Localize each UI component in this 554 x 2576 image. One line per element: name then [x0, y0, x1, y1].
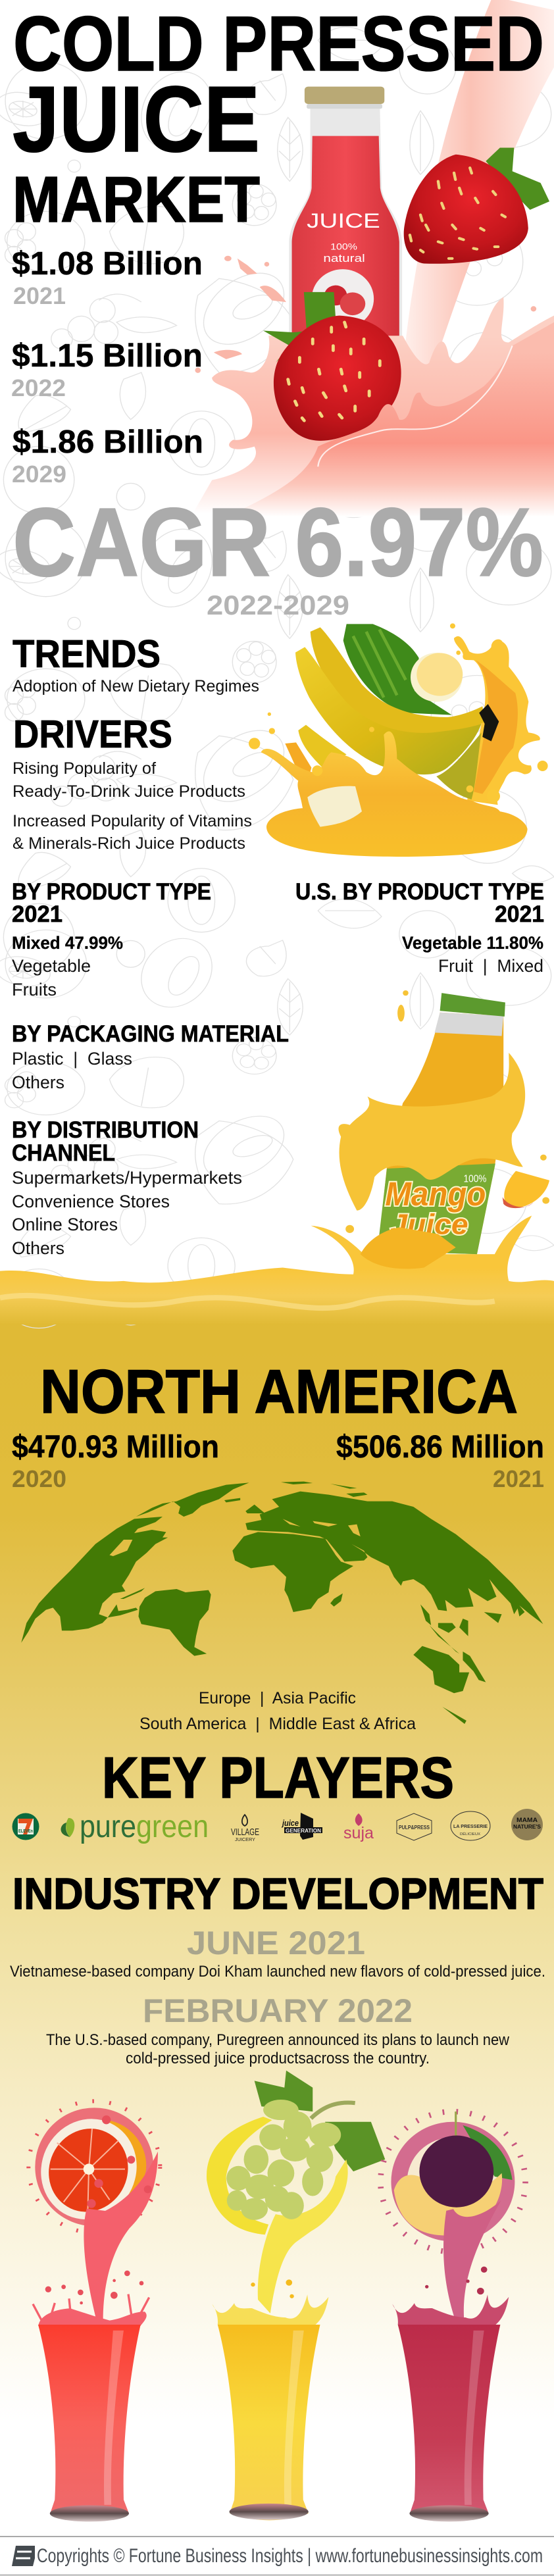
logo: 7-Eleven: ELEVEn [18, 1829, 33, 1834]
development: June 2021 [10, 1925, 545, 1981]
trends section [13, 632, 259, 695]
mango juice label text: 100% [464, 1174, 486, 1184]
by packaging material: Plastic | Glass [12, 1049, 132, 1069]
mango bottle [378, 993, 505, 1254]
small banana [298, 725, 347, 768]
North America 2020 value: 2020 [12, 1465, 66, 1492]
key player logos [12, 1809, 543, 1844]
North America heading: NORTH AMERICA [40, 1357, 518, 1426]
drivers section: & Minerals-Rich Juice Products [13, 834, 245, 853]
by distribution channel: Supermarkets/Hypermarkets [12, 1168, 242, 1188]
by distribution channel: Others [12, 1238, 64, 1258]
logo: Mama Nature's: MAMA [516, 1817, 538, 1823]
key players heading: KEY PLAYERS [102, 1745, 454, 1810]
logo: Juice Generation: juice [281, 1818, 299, 1828]
logo: 7-Eleven [12, 1813, 39, 1840]
yellow gradient background [0, 1316, 554, 2540]
value 2021: 2021 [13, 282, 66, 309]
illustration: mango juice bottle and wave [0, 990, 554, 1325]
splash foreground [226, 322, 554, 517]
value 2022: $1.15 Billion [12, 338, 203, 374]
drivers section: Increased Popularity of Vitamins [13, 812, 252, 830]
footer logo [12, 2546, 35, 2566]
by packaging material [12, 1021, 289, 1092]
logo: puregreen: pure [80, 1809, 136, 1844]
North America 2021 value: $506.86 Million [336, 1430, 544, 1465]
title: MARKET [13, 163, 260, 236]
juice bottle [289, 87, 402, 436]
mango slice [504, 1171, 549, 1207]
drivers section [13, 713, 252, 853]
banana slice top [411, 653, 463, 702]
by packaging material: Others [12, 1073, 64, 1092]
value 2022: 2022 [11, 374, 66, 401]
logo: La Presserie: LA PRESSERIE [453, 1823, 488, 1829]
red grapefruit fruit and pour [24, 2101, 160, 2326]
other regions list: South America | Middle East & Africa [139, 1715, 416, 1733]
mango juice label text [385, 1174, 486, 1240]
drivers section: Ready-To-Drink Juice Products [13, 782, 245, 801]
by packaging material: BY PACKAGING MATERIAL [12, 1021, 289, 1047]
development: June 2021: JUNE 2021 [187, 1925, 365, 1961]
logo: Village Juicery: VILLAGE [231, 1827, 259, 1838]
logo: Juice Generation: GENERATION [286, 1828, 321, 1834]
CAGR figure: 2022-2029 [207, 590, 349, 620]
trends section: Adoption of New Dietary Regimes [13, 677, 259, 695]
U.S. by product type [295, 879, 544, 976]
juice bottle: JUICE [307, 209, 380, 232]
logo: Mama Nature's [511, 1809, 543, 1840]
by distribution channel: CHANNEL [12, 1140, 115, 1166]
value 2021 [12, 246, 203, 309]
juice wave [0, 1215, 554, 1325]
mango cubes [361, 1227, 456, 1269]
juice droplets [195, 256, 536, 373]
logo: Village Juicery: JUICERY [235, 1838, 255, 1842]
by distribution channel: Online Stores [12, 1215, 118, 1234]
value 2029: 2029 [12, 461, 66, 488]
drivers section: DRIVERS [13, 713, 172, 756]
droplets [345, 990, 549, 1233]
market values [11, 246, 203, 488]
mango juice label text: Mango [385, 1176, 486, 1213]
North America 2021 value [336, 1430, 544, 1492]
right juice splash [454, 636, 540, 805]
yellow grape fruit, pour and glass [207, 2071, 385, 2520]
third banana [436, 732, 482, 799]
logo: Pulp & Press [397, 1813, 432, 1840]
by product type [12, 879, 211, 999]
logo: Mama Nature's: NATURE'S [513, 1824, 541, 1830]
development: February 2022 [46, 1992, 510, 2067]
development: February 2022: The U.S.-based company, Puregreen announced its plans to launch new [46, 2031, 510, 2049]
U.S. by product type: 2021 [495, 901, 544, 927]
illustration: strawberry juice bottle and splash [191, 0, 554, 517]
top strawberry [404, 147, 549, 264]
mango juice label text: Juice [390, 1208, 468, 1240]
juice glasses illustration [24, 2071, 526, 2521]
front banana [295, 647, 482, 774]
by product type: Vegetable [12, 956, 91, 976]
by product type: BY PRODUCT TYPE [12, 879, 211, 905]
by distribution channel [12, 1117, 242, 1258]
development: February 2022: cold-pressed juice productsacross the country. [126, 2050, 430, 2067]
banana leaf [343, 624, 452, 715]
juice bottle: 100% [330, 242, 357, 252]
U.S. by product type: Vegetable 11.80% [402, 933, 543, 953]
logo: Pulp & Press: PULP&PRESS [399, 1825, 430, 1831]
logo: puregreen: green [136, 1809, 209, 1844]
other regions list [139, 1689, 416, 1733]
juice bottle: natural [323, 252, 365, 265]
by distribution channel: BY DISTRIBUTION [12, 1117, 199, 1143]
left juice fold [285, 742, 311, 776]
trends section: TRENDS [13, 632, 161, 676]
by product type: Mixed 47.99% [12, 933, 123, 953]
North America 2020 value [12, 1430, 219, 1492]
by distribution channel: Convenience Stores [12, 1192, 170, 1211]
value 2021: $1.08 Billion [12, 246, 203, 282]
logo: La Presserie [451, 1811, 490, 1840]
banana slice bottom [307, 786, 362, 827]
red glass [38, 2325, 141, 2521]
value 2029 [12, 424, 203, 488]
pink juice stream [403, 0, 554, 369]
juice puddle [261, 731, 528, 857]
logo: Suja: suja [343, 1824, 374, 1842]
illustration: bananas in juice splash [249, 623, 548, 857]
title: JUICE [13, 67, 260, 172]
by product type: Fruits [12, 980, 57, 999]
banana stem [479, 704, 499, 742]
bottom strawberry [263, 292, 401, 441]
world map [13, 1482, 543, 1724]
back banana [311, 627, 485, 743]
juice droplets [249, 623, 548, 803]
other regions list: Europe | Asia Pacific [199, 1689, 356, 1707]
juice swirl [339, 1053, 525, 1211]
by product type: 2021 [12, 901, 63, 927]
logo: Suja [343, 1813, 374, 1842]
value 2029: $1.86 Billion [13, 424, 203, 460]
logo: La Presserie: DÉLICIEUX [460, 1832, 481, 1836]
North America 2020 value: $470.93 Million [12, 1430, 219, 1465]
title [13, 1, 544, 236]
logo: Village Juicery [231, 1815, 259, 1842]
North America 2021 value: 2021 [493, 1465, 544, 1492]
logo: puregreen [61, 1809, 209, 1844]
development: February 2022: FEBRUARY 2022 [143, 1992, 413, 2029]
U.S. by product type: Fruit | Mixed [438, 956, 543, 976]
footer band [0, 2537, 554, 2575]
drivers section: Rising Popularity of [13, 759, 156, 778]
value 2022 [11, 338, 203, 401]
background fruit doodle pattern [0, 27, 554, 1328]
logo: Juice Generation [281, 1813, 322, 1840]
plum fruit, pour and glass [380, 2111, 526, 2521]
pink juice splash [191, 297, 554, 517]
